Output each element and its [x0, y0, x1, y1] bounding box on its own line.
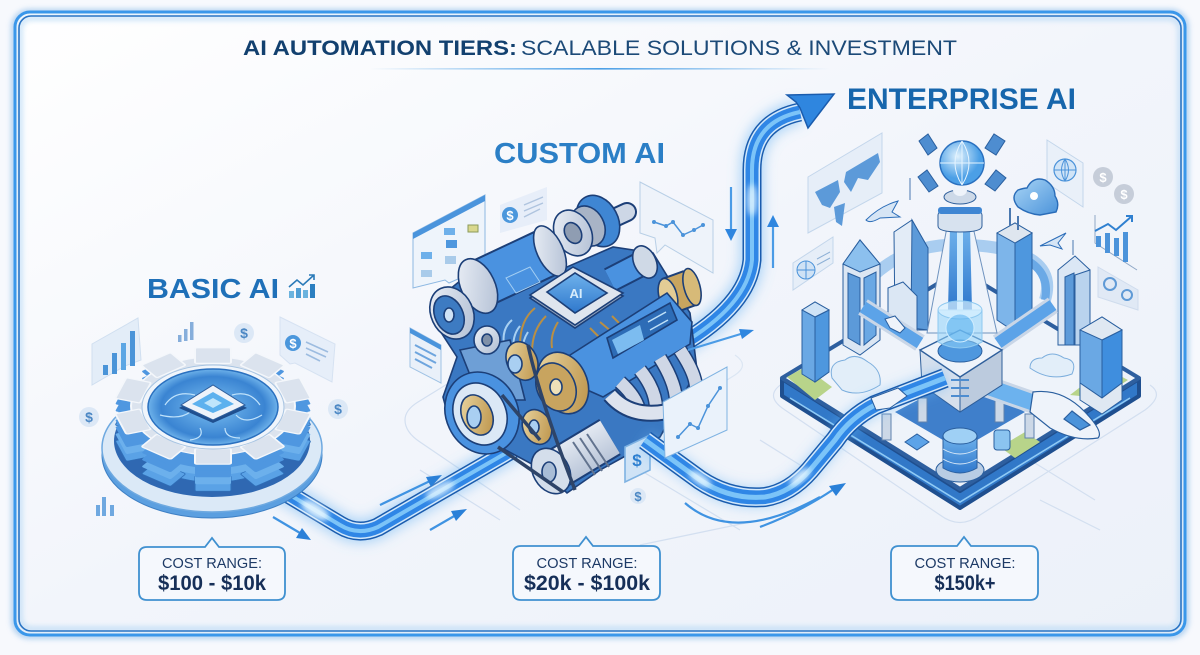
line chart panel [640, 182, 713, 273]
small bar icon [178, 322, 194, 342]
hub [920, 330, 1002, 412]
tier 3: Enterprise AI heading: ENTERPRISE AI [847, 83, 1076, 116]
cable bundle [504, 320, 528, 362]
gold pulleys [500, 337, 598, 449]
dollar coin below engine: $ [634, 489, 642, 504]
clouds [831, 354, 1074, 393]
toothed roller [523, 434, 610, 501]
cost box: Basic AI: $100 - $10k [158, 572, 266, 595]
valve cover [567, 293, 692, 397]
far left block [802, 302, 829, 382]
cost box: Custom AI: $20k - $100k [524, 572, 650, 595]
back right tower [997, 208, 1032, 330]
dollar coin right [328, 399, 348, 419]
title [243, 37, 957, 70]
drive belt [498, 345, 575, 492]
dollar tag: $ [632, 451, 642, 470]
blue cylinder [450, 221, 573, 319]
right spiral note [1098, 267, 1138, 310]
front right building [1080, 317, 1122, 414]
bullet train [1030, 391, 1099, 439]
settings list panel [410, 328, 441, 383]
AI chip [179, 385, 247, 423]
cost box: Enterprise AI: COST RANGE: [914, 556, 1016, 572]
tier 2: Custom AI heading: CUSTOM AI [494, 138, 665, 170]
circuit disc [142, 365, 284, 449]
tier 2: floating panels [410, 182, 713, 383]
platform base [782, 270, 1139, 508]
cost box: Enterprise AI: $150k+ [934, 572, 996, 595]
gear body [115, 348, 311, 491]
blueprint floor lines [405, 355, 1156, 545]
dollar coin left [79, 407, 99, 427]
tier 3: floating panels [793, 133, 1138, 310]
upper shaft [546, 188, 628, 263]
title: SCALABLE SOLUTIONS & INVESTMENT [521, 37, 957, 60]
bar chart card [92, 318, 141, 385]
tier 1: gear with AI chip [102, 348, 322, 518]
holographic core [938, 301, 982, 348]
tier 1: Basic AI heading: BASIC AI [147, 273, 279, 304]
left bracket [460, 326, 525, 400]
support columns [882, 398, 1034, 440]
left crystal tower [843, 240, 880, 355]
server stack [905, 428, 1010, 482]
left front pulley [422, 280, 482, 346]
gray dollar coins: $ [1120, 187, 1128, 202]
chip housing [530, 267, 623, 328]
engine block [433, 247, 697, 493]
side arrows between tiers [688, 187, 779, 350]
ring road [860, 245, 1047, 300]
cloud lock icon [1014, 179, 1058, 215]
dollar coin right: $ [334, 401, 342, 417]
cost box: Enterprise AI [891, 537, 1038, 600]
dollar coin top: $ [240, 325, 248, 341]
small shuttle on rear road [885, 316, 905, 333]
dollar note [500, 187, 547, 233]
dollar coin below engine [630, 488, 646, 504]
exhaust manifold [610, 350, 696, 418]
globe panel [1047, 140, 1083, 207]
dollar tag [625, 435, 650, 482]
cost box: Custom AI: COST RANGE: [536, 556, 638, 572]
world map panel [808, 133, 882, 233]
tier 2: engine [422, 188, 705, 501]
tier 2: foreground chart panel [663, 367, 727, 458]
tier 3: isometric city platform [782, 134, 1139, 508]
icon: mini growth chart [289, 275, 315, 298]
gray dollar coins: $ [1099, 170, 1107, 185]
globe with satellites [918, 134, 1006, 192]
central tower [927, 184, 997, 333]
large blue pulley [432, 360, 532, 466]
cost box: Custom AI [513, 537, 660, 600]
dollar coin top [234, 323, 254, 343]
small bars lower left [96, 497, 114, 516]
chip housing: AI [570, 286, 582, 301]
growth chart [1095, 215, 1137, 270]
left globe note [793, 237, 833, 290]
invoice bubble [280, 317, 335, 382]
small flow arrows left [273, 475, 467, 540]
dollar note: $ [506, 208, 514, 223]
main pipeline: upward growth arrow [265, 94, 834, 531]
rear small cylinder [610, 242, 662, 282]
workflow panel [413, 195, 485, 288]
secondary pipeline into city [645, 378, 945, 497]
gear base disc [102, 384, 322, 518]
right tall tower [1058, 240, 1090, 345]
flow arrow under city [685, 483, 846, 527]
cost box: Basic AI [139, 538, 285, 600]
cost box: Basic AI: COST RANGE: [162, 556, 262, 572]
gray dollar coins [1093, 167, 1134, 204]
back left tower [888, 178, 928, 335]
airplanes [866, 201, 1066, 249]
gold rear pulley [655, 267, 705, 316]
invoice bubble: $ [289, 336, 297, 351]
elevated roads [863, 305, 1053, 405]
dollar coin left: $ [85, 409, 93, 425]
tier 1: floating data panels around gear [79, 317, 348, 516]
gold wiring [520, 308, 622, 352]
title: AI AUTOMATION TIERS: [243, 37, 517, 60]
